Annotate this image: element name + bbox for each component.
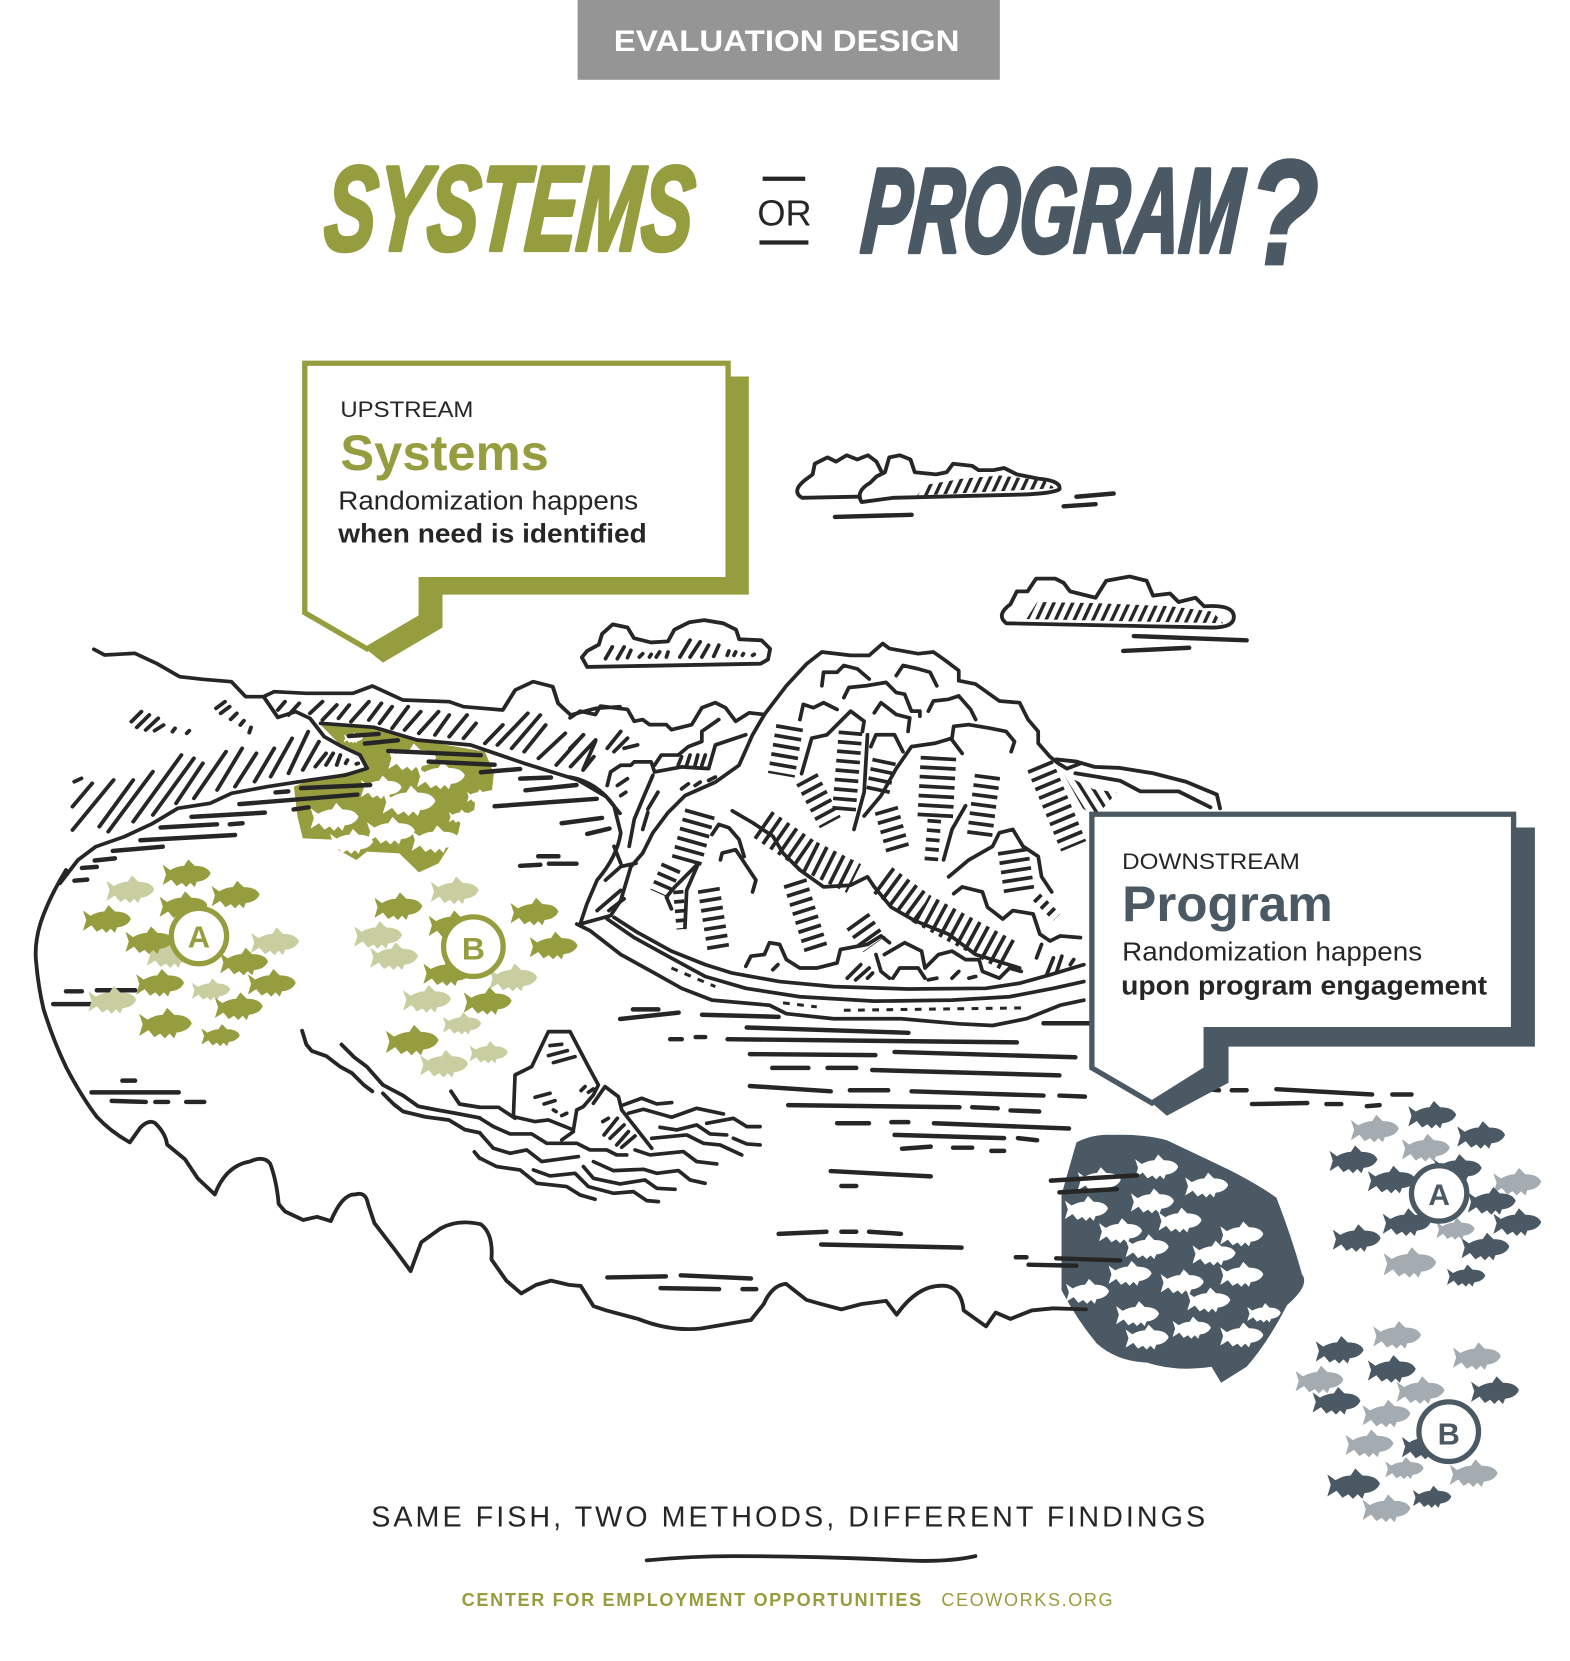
callout frame [1092, 814, 1514, 1103]
callout: program downstream [1092, 814, 1535, 1116]
dark fish [83, 859, 296, 1046]
white fish in olive school [311, 732, 491, 854]
group badge A [1411, 1166, 1467, 1221]
group badge B [444, 917, 503, 976]
olive school mass [294, 725, 494, 872]
callout heading: Systems [340, 425, 549, 481]
title word: program: PROGRAM [857, 143, 1249, 278]
cloud: left [582, 620, 770, 667]
title question mark: ? [1249, 129, 1319, 296]
light fish [88, 875, 299, 1014]
footer website: CEOWORKS.ORG [941, 1590, 1113, 1610]
group badge B: B [1438, 1416, 1460, 1451]
school of fish: systems (selected) [294, 725, 494, 872]
callout: systems upstream [305, 363, 749, 663]
light fish [1296, 1321, 1501, 1522]
mountain and cliff [570, 644, 1084, 1025]
slate school mass [1062, 1135, 1304, 1383]
callout shadow [1152, 828, 1535, 1116]
title connector: or: OR [757, 192, 812, 233]
water lines [53, 734, 1411, 1289]
group badge A [171, 908, 227, 964]
tagline underline [647, 1556, 975, 1561]
lake outer shoreline [36, 870, 1086, 1329]
waves [480, 1098, 760, 1202]
cloud: upper [797, 455, 1114, 517]
callout emphasis: when need is identified [337, 518, 647, 548]
fish group A: program [1330, 1101, 1541, 1287]
white fish in slate school [1065, 1154, 1281, 1350]
callout frame [305, 363, 728, 649]
foliage contours [666, 665, 1052, 927]
title word: systems: SYSTEMS [320, 141, 700, 276]
light fish [1351, 1115, 1541, 1278]
footer organisation: CENTER FOR EMPLOYMENT OPPORTUNITIES [462, 1590, 921, 1610]
school of fish: program (selected) [1062, 1135, 1304, 1383]
cliff foliage [570, 703, 764, 924]
callout text: Randomization happens [1122, 938, 1422, 966]
back ridge behind mountain [1056, 759, 1220, 817]
cloud: right [1002, 576, 1247, 651]
shore bands [577, 917, 1084, 1025]
main diagonal hatch band [763, 824, 854, 878]
title [320, 129, 1319, 296]
callout text: Randomization happens [338, 487, 638, 515]
fish group B: program [1296, 1321, 1519, 1522]
callout shadow [367, 377, 749, 663]
far hills, ledge and hatches [60, 649, 620, 883]
foreground foliage [746, 887, 1080, 978]
waves: left of islet [302, 1031, 480, 1158]
shoreline and lake landscape [36, 649, 1411, 1329]
islet rock and waves [480, 1032, 760, 1202]
rock [513, 1032, 652, 1148]
header banner: EVALUATION DESIGN [614, 25, 959, 58]
fish group A: systems [83, 859, 299, 1046]
group badge A: A [1428, 1179, 1450, 1212]
callout kicker: DOWNSTREAM [1122, 849, 1300, 874]
shore pebbles [671, 968, 1023, 1010]
group badge B: B [462, 930, 485, 966]
dark fish [374, 892, 578, 1055]
tagline: SAME FISH, TWO METHODS, DIFFERENT FINDINGS [371, 1501, 1205, 1533]
fish group B: systems [354, 876, 578, 1077]
header banner [578, 0, 1000, 80]
dark fish [1330, 1101, 1541, 1287]
callout heading: Program [1122, 876, 1333, 932]
mountain hatch strips [781, 726, 790, 775]
callout emphasis: upon program engagement [1121, 971, 1487, 1001]
dark fish [1313, 1336, 1519, 1508]
mountain outline [764, 644, 1080, 769]
group badge B [1419, 1402, 1479, 1461]
callout kicker: UPSTREAM [340, 397, 473, 422]
light fish [354, 876, 537, 1077]
title connector: or [757, 179, 812, 243]
group badge A: A [188, 920, 210, 955]
